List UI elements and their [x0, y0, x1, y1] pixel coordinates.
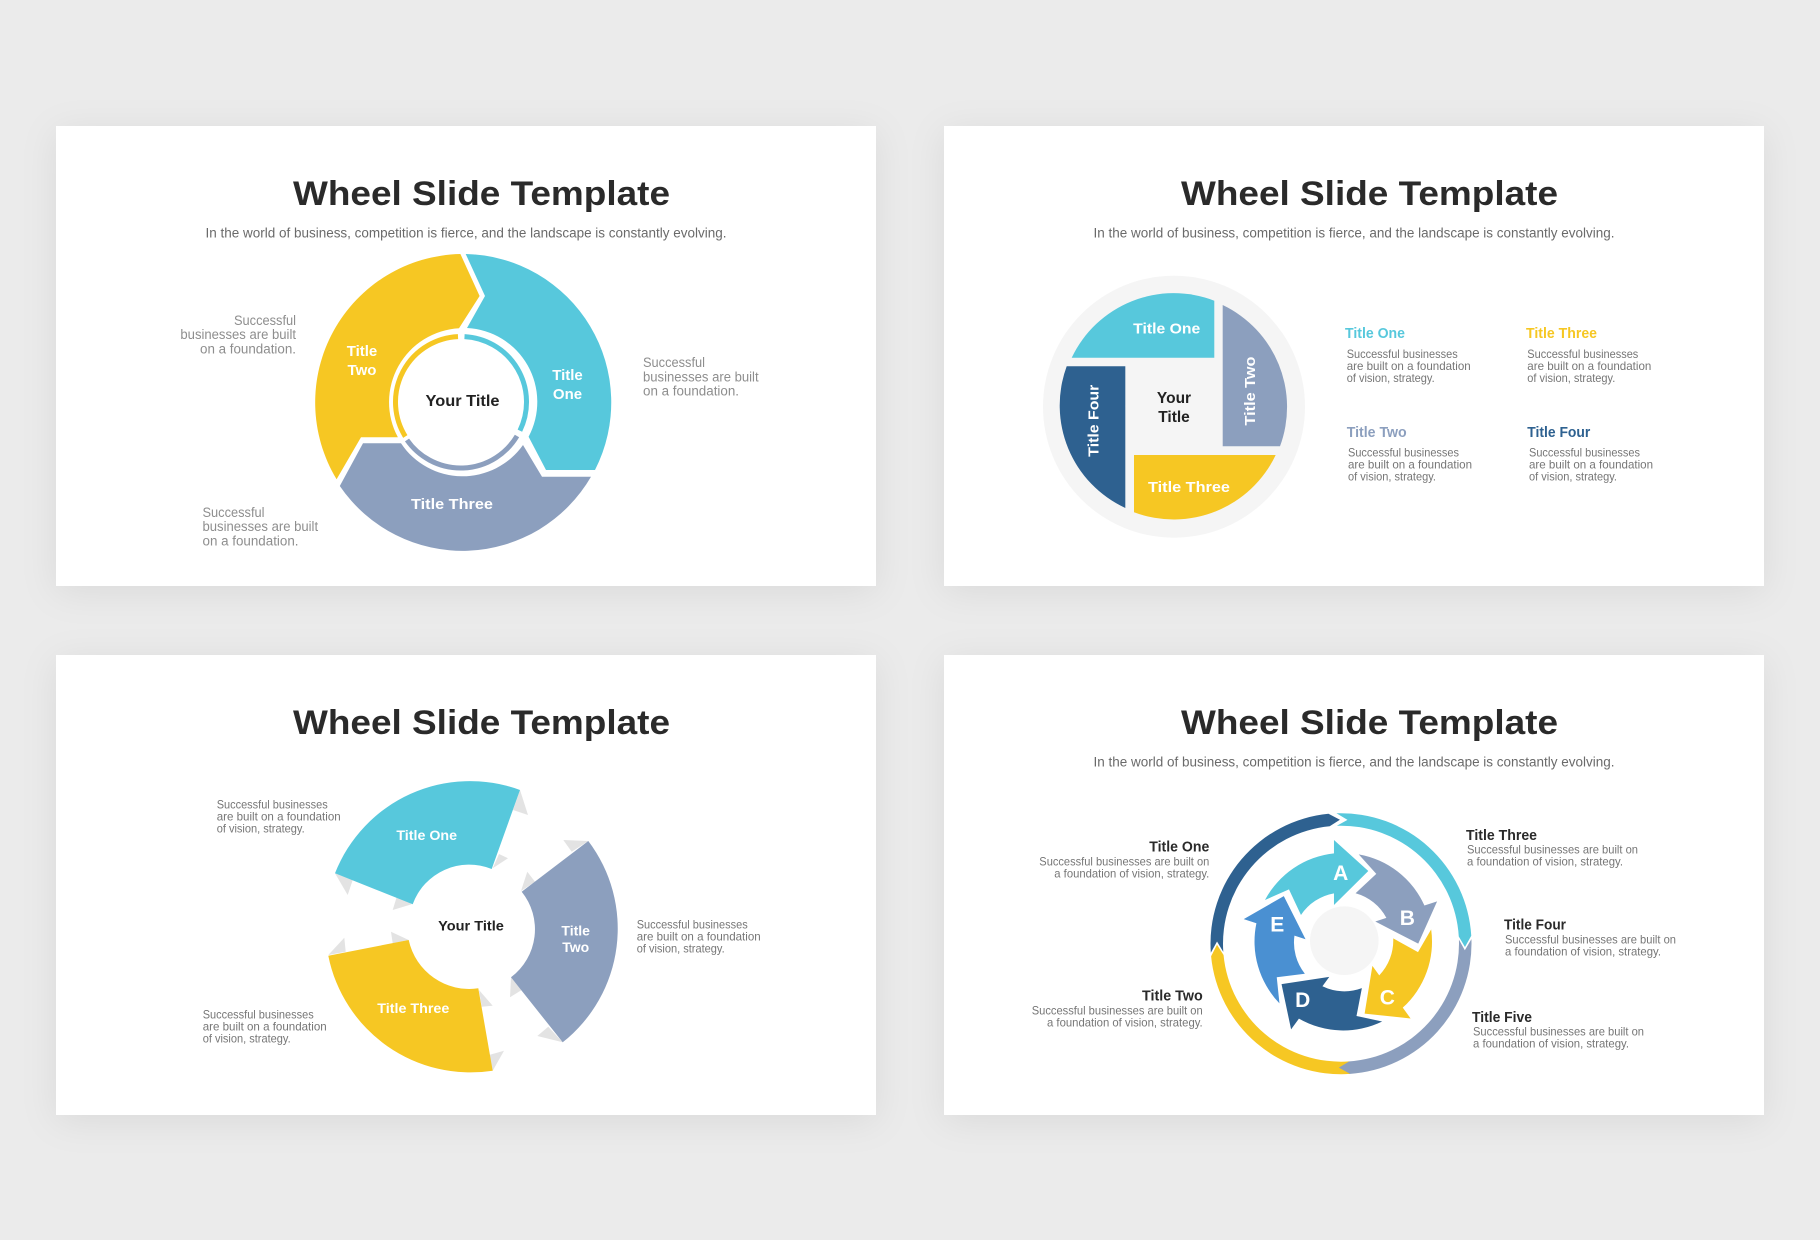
outer ring arrow: slate [1338, 939, 1471, 1074]
callout: title three: Title Three [1466, 828, 1537, 844]
center label: Title [1158, 409, 1190, 426]
description: left top: businesses are built [180, 327, 296, 342]
card background [56, 126, 876, 586]
heading: Wheel Slide Template [293, 175, 670, 213]
description: right: Successful [643, 355, 705, 370]
card background [944, 126, 1764, 586]
description: right: of vision, strategy. [637, 942, 725, 956]
description: right: Successful businesses [637, 918, 748, 932]
description: top left: Successful businesses [217, 798, 328, 812]
description: bottom left: are built on a foundation [203, 1020, 327, 1034]
description: right: businesses are built [643, 370, 759, 384]
description: right [637, 918, 761, 956]
heading: Wheel Slide Template [293, 704, 670, 742]
callout: title two: Successful businesses are built on [1032, 1004, 1203, 1018]
description: top left: are built on a foundation [217, 810, 341, 824]
legend: title two: are built on a foundation [1348, 458, 1472, 472]
callout: title one: a foundation of vision, strategy. [1054, 866, 1209, 880]
description: right: are built on a foundation [637, 930, 761, 944]
legend: title one: of vision, strategy. [1347, 371, 1435, 385]
subtitle: In the world of business, competition is fierce, and the landscape is constantly evolving. [206, 226, 726, 240]
legend: title one: Successful businesses [1347, 347, 1458, 361]
card background [944, 655, 1764, 1115]
legend: title three: are built on a foundation [1527, 359, 1651, 373]
callout: title four: a foundation of vision, strategy. [1505, 944, 1661, 958]
callout: title three: Successful businesses are built on [1467, 842, 1638, 856]
segment: title two [315, 254, 480, 479]
legend: title three: Title Three [1526, 326, 1597, 342]
subtitle: In the world of business, competition is fierce, and the landscape is constantly evolving. [1094, 226, 1614, 240]
inner arrow C [1339, 917, 1466, 1039]
legend: title two: Successful businesses [1348, 446, 1459, 460]
letter E: E [1270, 914, 1284, 937]
label: title two: Title [561, 922, 590, 938]
center label: Your Title [438, 918, 504, 934]
center label: Your Title [426, 393, 500, 410]
label: title four: Title Four [1085, 385, 1102, 457]
center hub [1310, 906, 1379, 975]
legend: title three [1526, 326, 1651, 385]
inner ring arc: yellow [395, 337, 458, 436]
label: title two: Title Two [1242, 356, 1259, 426]
callout: title one: Successful businesses are built on [1039, 854, 1209, 868]
legend: title one: are built on a foundation [1347, 359, 1471, 373]
letter D: D [1295, 989, 1310, 1012]
description: left top: Successful [234, 313, 296, 328]
label: title two: Title [347, 343, 377, 360]
inner ring arc: slate [407, 436, 517, 468]
heading: Wheel Slide Template [1181, 175, 1558, 213]
description: left bottom: Successful [202, 505, 264, 520]
callout: title two [1032, 989, 1203, 1029]
callout: title five: a foundation of vision, strategy. [1473, 1037, 1629, 1051]
legend: title four: of vision, strategy. [1529, 470, 1617, 484]
wheel backdrop circle [1043, 276, 1305, 538]
outer ring arrow: dark blue [1206, 813, 1344, 953]
description: top left: of vision, strategy. [217, 822, 305, 836]
callout: title four: Successful businesses are built on [1505, 932, 1676, 946]
label: title three: Title Three [377, 1000, 450, 1016]
label: title two: Two [348, 362, 376, 379]
description: right: on a foundation. [643, 384, 739, 398]
legend: title two: of vision, strategy. [1348, 470, 1436, 484]
description: right [643, 355, 759, 398]
letter B: B [1400, 907, 1415, 930]
callout: title two: a foundation of vision, strategy. [1047, 1015, 1203, 1029]
segment: title one [1072, 293, 1214, 358]
description: bottom left [203, 1008, 327, 1046]
letter C: C [1380, 986, 1395, 1009]
callout: title one: Title One [1149, 840, 1209, 856]
description: left bottom: on a foundation. [202, 534, 298, 548]
callout: title four [1504, 918, 1676, 958]
legend: title three: Successful businesses [1527, 347, 1638, 361]
callout: title three [1466, 828, 1638, 868]
description: left bottom: businesses are built [202, 519, 318, 534]
callout: title two: Title Two [1142, 989, 1203, 1005]
description: bottom left: of vision, strategy. [203, 1032, 291, 1046]
description: left bottom [202, 505, 318, 548]
wedge corner shadows [328, 790, 588, 1071]
legend: title one: Title One [1345, 326, 1405, 342]
segment: title one [466, 254, 611, 470]
callout: title five: Title Five [1472, 1010, 1532, 1026]
inner ring arc: teal [464, 337, 527, 431]
legend: title four [1527, 425, 1653, 484]
panel: four-segment square wheel [944, 126, 1764, 586]
callout: title one [1039, 840, 1209, 880]
legend: title four: are built on a foundation [1529, 458, 1653, 472]
panel: separated wedge wheel [56, 655, 876, 1115]
segment: title three [340, 443, 591, 551]
inner arrow E [1222, 887, 1326, 1008]
legend: title four: Successful businesses [1529, 446, 1640, 460]
panel: three-segment wheel [56, 126, 876, 586]
legend: title three: of vision, strategy. [1527, 371, 1615, 385]
label: title one: One [553, 386, 582, 403]
segment: title three [1134, 455, 1276, 519]
description: left top: on a foundation. [200, 342, 296, 356]
callout: title five: Successful businesses are built on [1473, 1025, 1644, 1039]
inner arrow D [1263, 949, 1391, 1070]
wedge: title three [328, 940, 493, 1072]
center label: Your [1157, 390, 1191, 407]
inner arrow B [1344, 836, 1448, 957]
legend: title two [1347, 425, 1472, 484]
label: title one: Title One [396, 827, 457, 843]
letter A: A [1333, 862, 1348, 885]
label: title three: Title Three [411, 496, 493, 513]
description: bottom left: Successful businesses [203, 1008, 314, 1022]
legend: title two: Title Two [1347, 425, 1407, 441]
panel: arrow cycle wheel [944, 655, 1764, 1115]
legend: title one [1345, 326, 1471, 385]
label: title three: Title Three [1148, 479, 1230, 496]
callout: title five [1472, 1010, 1644, 1051]
wedge: title two [511, 841, 618, 1042]
outer ring arrow: yellow [1211, 940, 1350, 1079]
heading: Wheel Slide Template [1181, 704, 1558, 742]
outer ring arrow: teal [1336, 813, 1471, 947]
inner arrow A [1265, 840, 1368, 915]
wedge: title one [335, 781, 520, 904]
card background [56, 655, 876, 1115]
label: title one: Title [552, 367, 583, 384]
description: left top [180, 313, 296, 356]
legend: title four: Title Four [1527, 425, 1591, 441]
label: title two: Two [562, 939, 589, 955]
description: top left [217, 798, 341, 836]
subtitle: In the world of business, competition is fierce, and the landscape is constantly evolving. [1094, 754, 1614, 770]
label: title one: Title One [1133, 320, 1200, 338]
segment: title four [1060, 366, 1125, 508]
segment: title two [1223, 305, 1287, 446]
callout: title three: a foundation of vision, strategy. [1467, 854, 1623, 868]
callout: title four: Title Four [1504, 918, 1566, 934]
